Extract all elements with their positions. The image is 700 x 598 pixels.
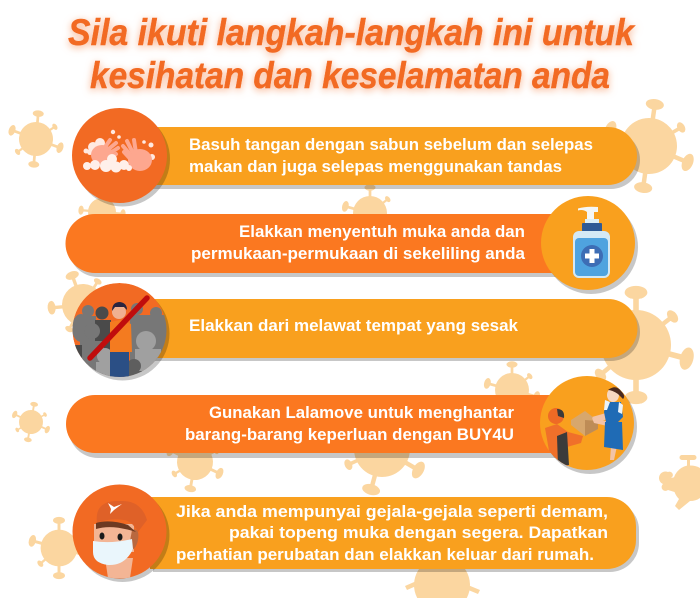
circle shadow: [76, 488, 170, 582]
icon: red slash: [90, 298, 147, 358]
circle shadow: [76, 286, 170, 380]
bar shadow: [68, 218, 563, 277]
text: wash hands: makan dan juga selepas menggunakan tandas: [189, 157, 562, 176]
circle shadow: [543, 380, 637, 474]
bar: [120, 299, 638, 358]
circle shadow: [544, 200, 638, 294]
text: symptoms: [176, 502, 608, 564]
bar shadow: [123, 303, 640, 361]
panel: wash hands: [72, 108, 640, 206]
text: wash hands: [189, 135, 593, 176]
bar: [66, 395, 560, 453]
bar shadow: [68, 399, 563, 458]
text: avoid touching: permukaan-permukaan di sekeliling anda: [191, 244, 526, 263]
text: avoid touching: Elakkan menyentuh muka anda dan: [239, 222, 525, 241]
title: kesihatan dan keselamatan anda: [90, 55, 610, 96]
icon: masked rider: [72, 484, 166, 578]
text: symptoms: Jika anda mempunyai gejala-gejala seperti demam,: [176, 502, 608, 521]
bar: [120, 127, 637, 185]
icon: crowd with slash: [72, 283, 168, 377]
text: symptoms: pakai topeng muka dengan segera. Dapatkan: [229, 523, 608, 542]
text: avoid crowds: Elakkan dari melawat tempat yang sesak: [189, 316, 519, 335]
text: delivery: [185, 403, 514, 444]
text: symptoms: perhatian perubatan dan elakkan keluar dari rumah.: [176, 545, 594, 564]
icon: sanitizer bottle: [541, 196, 635, 290]
bar: [66, 214, 560, 273]
bar: [150, 497, 636, 569]
panel: symptoms and mask: [72, 484, 639, 582]
text: delivery: barang-barang keperluan dengan BUY4U: [185, 425, 514, 444]
text: delivery: Gunakan Lalamove untuk menghantar: [209, 403, 514, 422]
panel: Lalamove delivery: [66, 376, 637, 474]
title: Sila ikuti langkah-langkah ini untuk: [68, 12, 636, 53]
text: wash hands: Basuh tangan dengan sabun sebelum dan selepas: [189, 135, 593, 154]
bar shadow: [123, 131, 640, 189]
bar shadow: [153, 501, 639, 572]
icon: delivery handover: [540, 376, 634, 470]
circle shadow: [75, 112, 170, 206]
icon: washing hands: [72, 108, 167, 203]
title: [68, 12, 636, 96]
panel: avoid crowds: [72, 283, 640, 380]
text: avoid touching: [191, 222, 526, 263]
panel: avoid touching face: [66, 196, 638, 294]
